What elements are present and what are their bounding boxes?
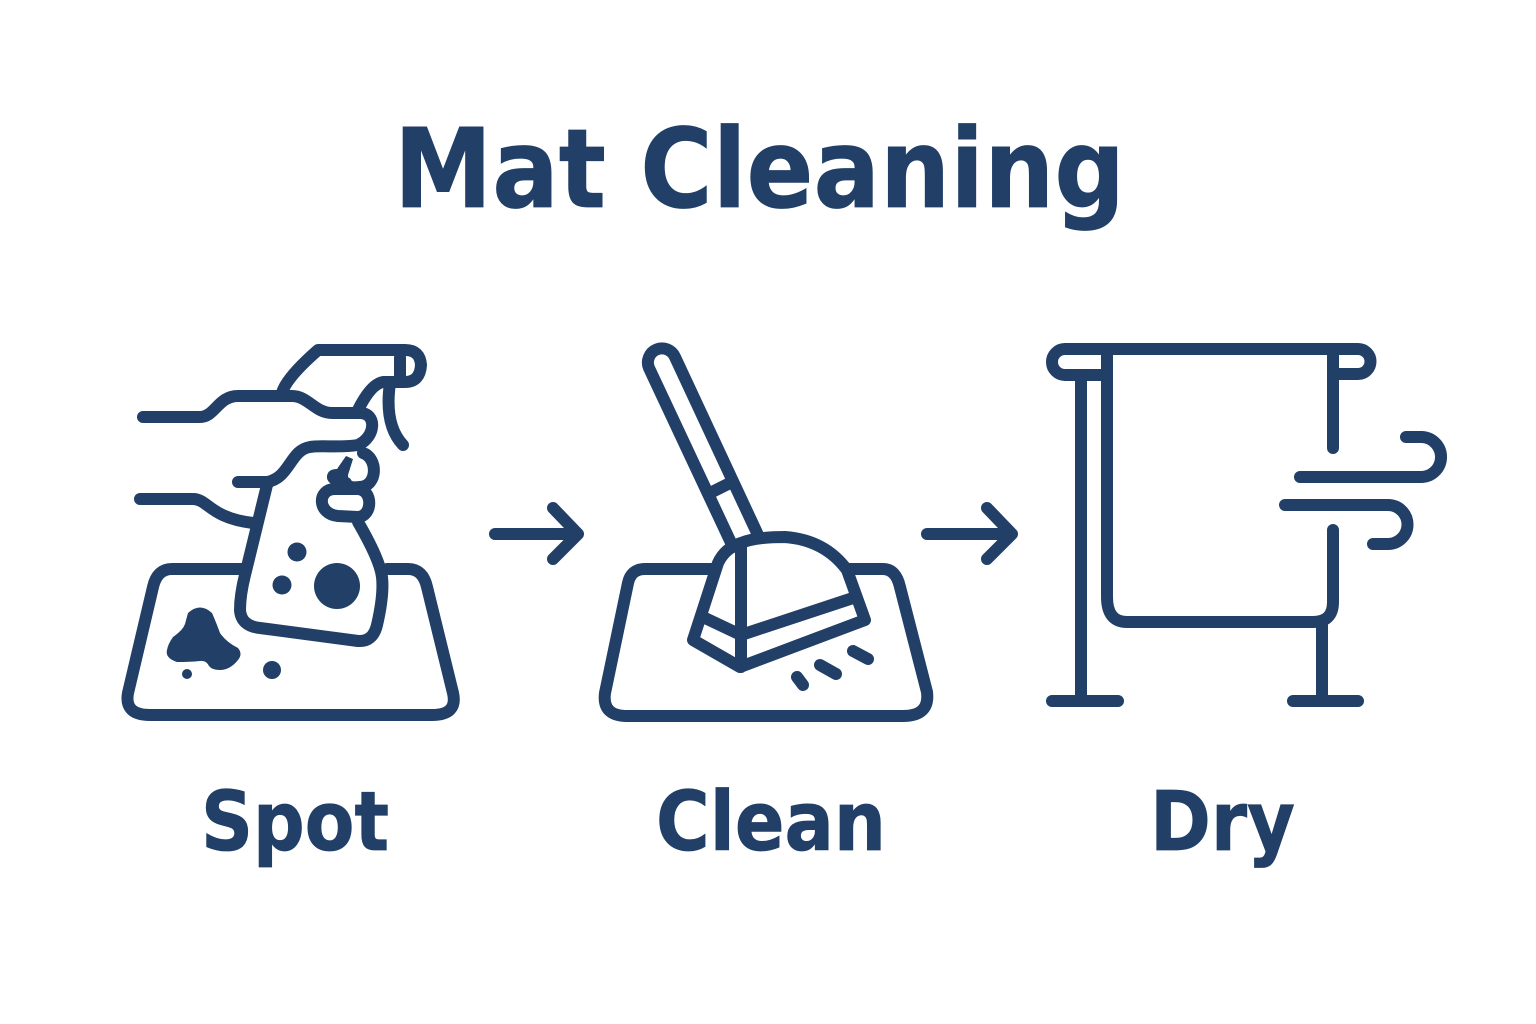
title: Mat Cleaning	[394, 105, 1125, 233]
icon: dry - towel on rack with wind	[1052, 349, 1441, 701]
mat outline	[127, 569, 454, 715]
label: clean: Clean	[656, 775, 886, 870]
spray nozzle and trigger	[282, 350, 421, 445]
spray bottle body	[240, 485, 382, 641]
arrow: spot to clean	[495, 508, 578, 559]
hanging mat	[1107, 349, 1333, 622]
gripping fingers	[322, 453, 374, 517]
spray droplets and large stain dot	[272, 542, 360, 609]
icon: clean - broom sweeping mat	[605, 348, 927, 716]
upper hand and arm	[143, 396, 372, 482]
broom handle	[648, 348, 758, 547]
sweep marks	[797, 651, 868, 685]
label: spot: Spot	[201, 775, 389, 870]
stain blob on mat	[167, 608, 240, 670]
broom head	[693, 537, 865, 667]
rack rail	[1052, 349, 1370, 375]
small stain dots	[182, 661, 281, 679]
wind lines	[1285, 437, 1441, 544]
icon: spot - hand spraying a stained mat	[127, 350, 454, 715]
mat outline	[605, 569, 927, 716]
lower arm	[140, 499, 253, 523]
label: dry: Dry	[1150, 775, 1295, 870]
rack legs and feet	[1052, 375, 1358, 701]
arrow: clean to dry	[927, 508, 1012, 559]
